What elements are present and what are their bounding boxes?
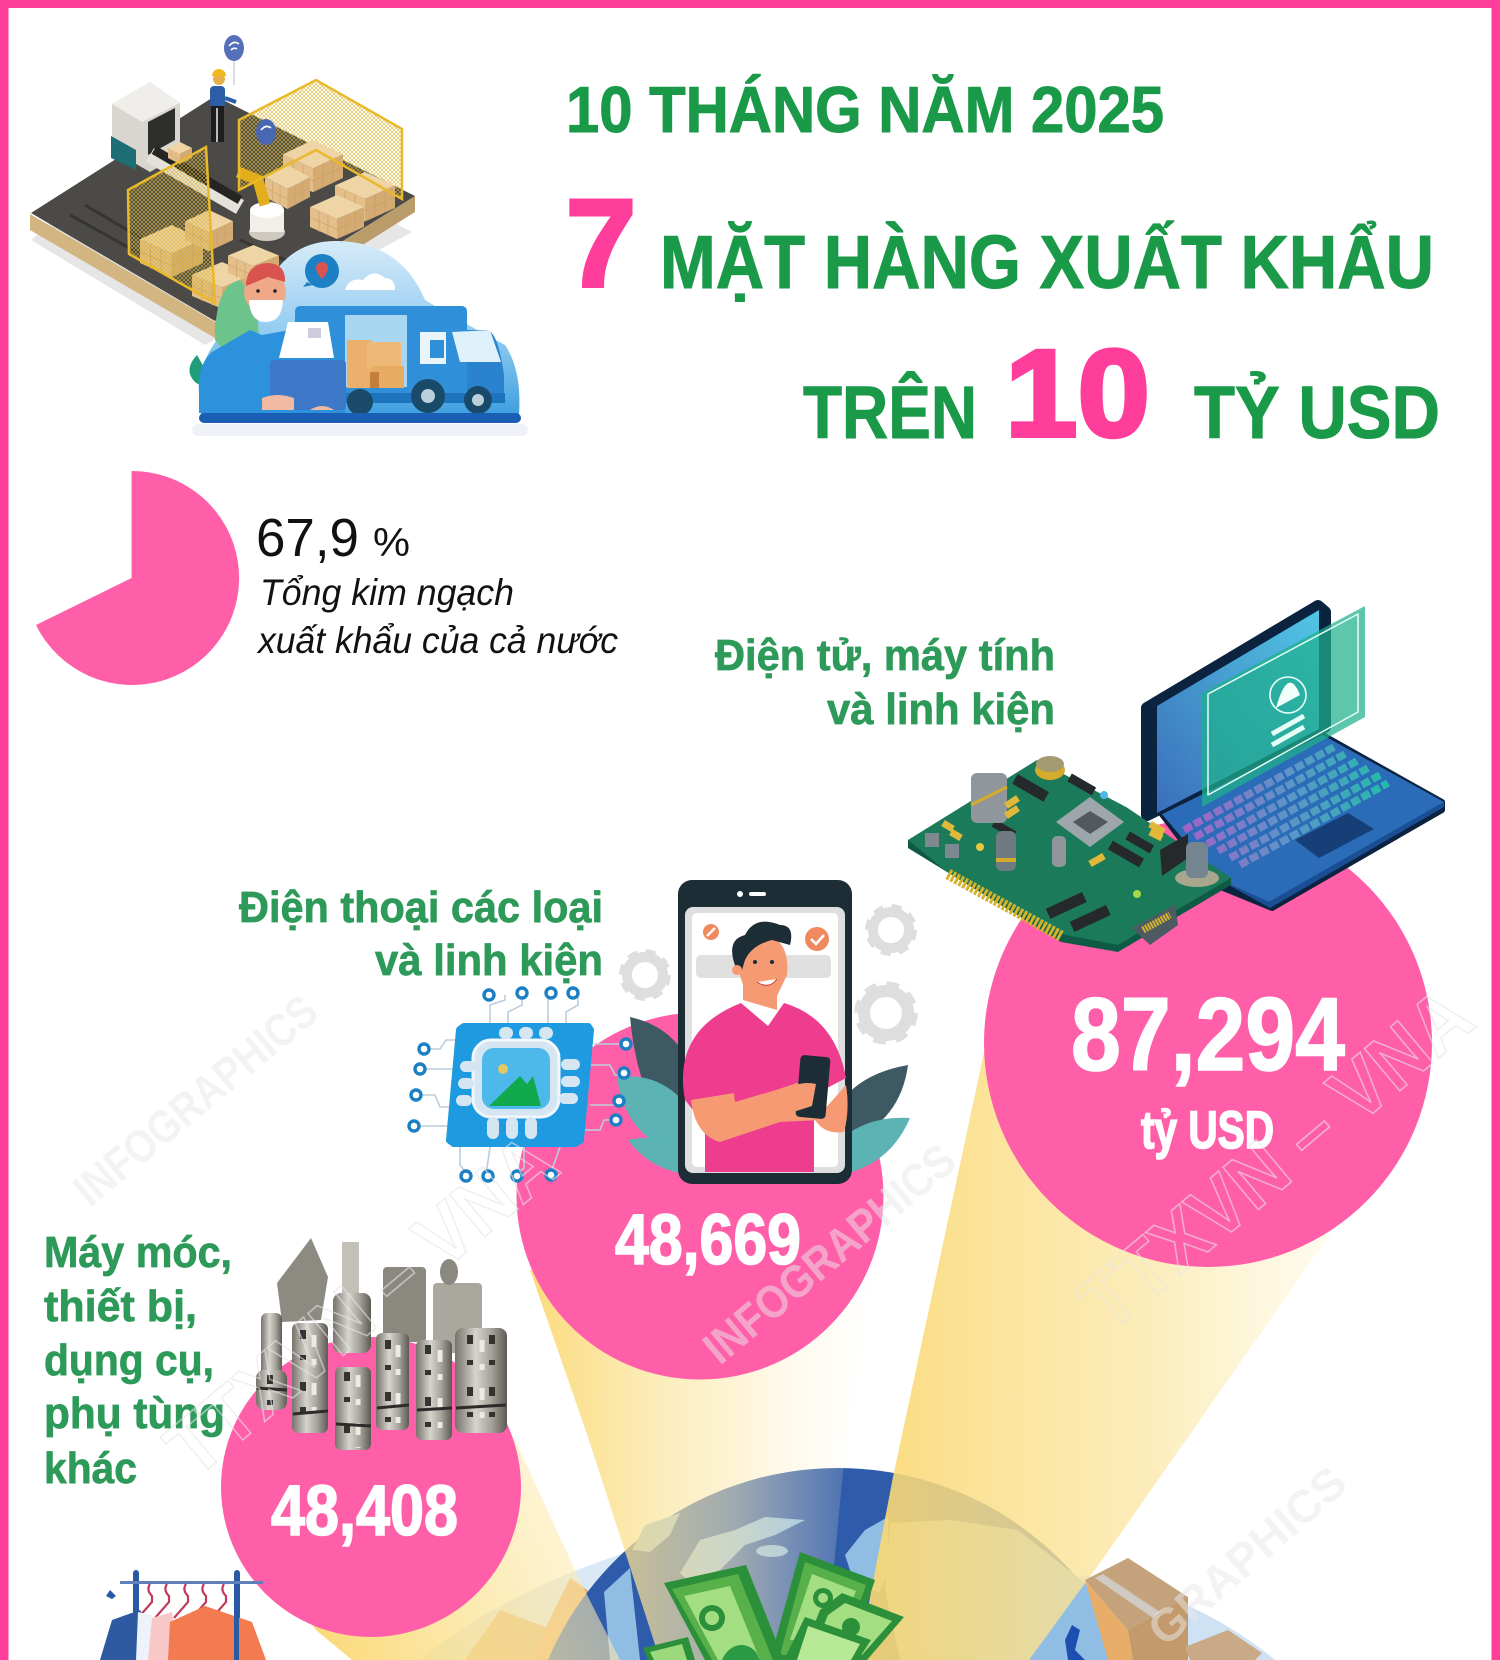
label: electronics [715, 631, 1055, 734]
illustration: delivery truck and worker [189, 241, 528, 436]
gold edge connector [948, 874, 1061, 936]
scanner machine [111, 82, 240, 207]
label: machinery [44, 1228, 232, 1493]
wifi badges [224, 35, 276, 145]
cargo boxes right of globe [1085, 1558, 1262, 1660]
title: line 3 suffix: TỶ USD [1194, 371, 1440, 454]
label: machinery: khác [44, 1444, 137, 1493]
watermark GRAPHICS: GRAPHICS [1137, 1456, 1356, 1656]
title: number 7: 7 [566, 175, 636, 313]
cloud [345, 273, 395, 290]
watermark INFOGRAPHICS: INFOGRAPHICS [63, 984, 328, 1216]
label: machinery: dụng cụ, [44, 1336, 214, 1385]
clipboard [270, 360, 346, 410]
back fence fill [239, 80, 402, 199]
central processor [1056, 797, 1124, 847]
garments [100, 1610, 150, 1660]
value: 48,408: 48,408 [271, 1472, 458, 1551]
keyboard [1184, 747, 1388, 865]
worker with mask [199, 263, 346, 413]
illustration: laptop [1147, 606, 1444, 908]
gear icon [858, 985, 914, 1041]
title: line 3 prefix: TRÊN [803, 371, 977, 454]
label: phones: Điện thoại các loại [239, 883, 603, 932]
bill: front left [664, 1565, 784, 1660]
yellow safety fences [128, 80, 402, 303]
illustration: smart factory [30, 35, 415, 345]
truck [295, 306, 505, 415]
label: phones: và linh kiện [375, 936, 603, 985]
leaves behind phone [617, 1017, 910, 1175]
pie chart 67.9% [36, 471, 239, 685]
pile of dollar bills [643, 1552, 904, 1660]
status icons [703, 924, 829, 951]
globe [548, 1468, 1128, 1660]
plants [189, 280, 259, 385]
label: electronics: và linh kiện [827, 685, 1055, 734]
value: 48,669: 48,669 [615, 1201, 801, 1280]
watermark INFOGRAPHICS: INFOGRAPHICS [693, 1133, 965, 1374]
globe continents [604, 1513, 1128, 1660]
cargo stacks [140, 140, 395, 309]
circle: electronics value [984, 819, 1432, 1267]
gear icon [622, 952, 668, 998]
ground bar [199, 413, 521, 423]
holographic window [1202, 606, 1365, 807]
black chips [992, 774, 1188, 932]
gear icon [868, 907, 914, 953]
light beam: machinery [290, 1440, 620, 1660]
robot arm [238, 172, 285, 241]
circle: phones value [516, 1012, 884, 1380]
light beam: phones [530, 1200, 880, 1660]
title: period: 10 THÁNG NĂM 2025 [566, 73, 1164, 146]
label: machinery: Máy móc, [44, 1228, 232, 1277]
bill: front right [784, 1617, 871, 1660]
percentage number: 67,9 [256, 508, 359, 568]
illustration: machine tools [256, 1238, 507, 1450]
value: 87,294: 87,294 [1071, 977, 1345, 1093]
orbit ring behind globe [420, 1548, 1275, 1660]
bill: small left [643, 1637, 695, 1660]
label: machinery: phụ tùng [44, 1389, 225, 1438]
label: machinery: thiết bị, [44, 1282, 197, 1331]
light beam: electronics [858, 1043, 1340, 1660]
circle: machinery value [221, 1337, 521, 1637]
location pin bubble [303, 254, 339, 288]
title: number 10: 10 [1005, 325, 1150, 463]
pie caption [256, 508, 618, 661]
hangers [138, 1584, 226, 1618]
illustration: microchip [409, 988, 631, 1181]
bill: right [800, 1593, 904, 1660]
label: electronics: Điện tử, máy tính [715, 631, 1055, 680]
unit: tỷ USD: tỷ USD [1141, 1101, 1274, 1160]
bill: back [770, 1552, 875, 1660]
label: phones [239, 883, 603, 985]
caption line 2: xuất khẩu của cả nước [256, 620, 618, 661]
illustration: clothing rack [100, 1570, 266, 1660]
circuit traces [414, 995, 622, 1175]
caption line 1: Tổng kim ngạch [260, 572, 514, 613]
parcels in truck [347, 340, 404, 388]
circuit nodes [409, 988, 631, 1181]
percent sign: % [373, 521, 410, 565]
watermark TTXVN VNA: TTXVN – VNA [149, 1116, 574, 1493]
capacitors and parts [925, 756, 1219, 898]
illustration: circuit board [908, 756, 1231, 952]
chip legs [456, 1027, 580, 1139]
cargo boxes left of globe [465, 1578, 610, 1660]
worker [210, 69, 236, 142]
illustration: phone with man [678, 880, 852, 1184]
man [683, 922, 848, 1172]
